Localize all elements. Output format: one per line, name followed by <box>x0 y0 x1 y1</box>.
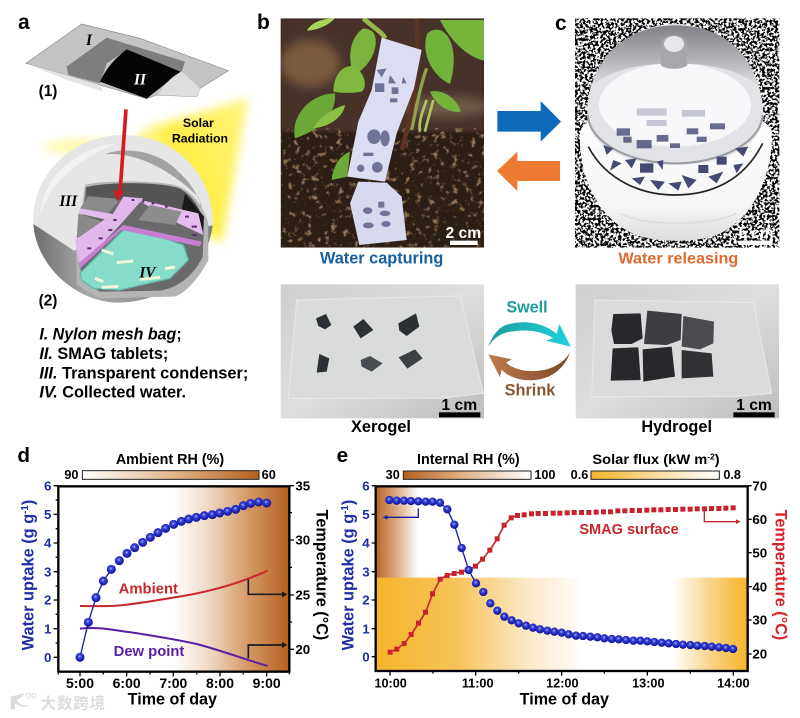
annotation: dew point: Dew point <box>114 644 184 660</box>
label: swell: Swell <box>506 299 548 317</box>
right axis labels: 60 <box>752 512 767 527</box>
solar radiation label: Solar <box>183 116 214 130</box>
annotation: SMAG surface: SMAG surface <box>579 522 679 538</box>
right axis labels <box>295 478 311 657</box>
icon: dome condenser (2) <box>33 135 213 303</box>
label: water capturing: Water capturing <box>320 250 443 268</box>
label: water releasing: Water releasing <box>618 250 738 268</box>
panel label b: b <box>257 11 270 34</box>
colorbar: solar flux <box>571 451 741 482</box>
colorbar: solar flux: -2 <box>707 452 715 461</box>
chart e <box>337 444 791 709</box>
panel label a: a <box>18 11 30 34</box>
right axis labels: 50 <box>752 545 767 560</box>
colorbar: ambient RH: Ambient RH (%) <box>116 452 224 468</box>
left axis labels <box>44 478 52 665</box>
right axis labels: 35 <box>295 478 311 493</box>
colorbar: internal RH <box>386 452 555 482</box>
axes frame and ticks <box>54 486 294 676</box>
arrow: shrink <box>488 353 570 380</box>
right axis title: Temperature (°C) <box>772 510 791 640</box>
watermark <box>11 693 105 713</box>
x axis labels: 8:00 <box>206 675 234 691</box>
label (1): (1) <box>39 83 57 100</box>
colorbar: internal RH: Internal RH (%) <box>417 452 520 468</box>
left axis labels: 2 <box>362 593 370 608</box>
legend list: I. Nylon mesh bag; <box>39 325 182 343</box>
chart d <box>11 444 332 713</box>
x axis labels: 10:00 <box>374 676 407 690</box>
left axis labels: 4 <box>362 536 370 551</box>
panel label e: e <box>337 444 348 467</box>
left axis labels: 3 <box>44 564 51 579</box>
icon: nylon mesh bag (1): I <box>85 32 93 49</box>
panel a: diagram of nylon bag and solar condenser <box>26 24 248 402</box>
colorbar: internal RH: 30 <box>386 468 400 482</box>
photo: xerogel <box>281 284 484 418</box>
icon: nylon mesh bag (1): II <box>133 72 147 89</box>
scale bar 1 cm: 1 cm <box>441 397 477 414</box>
icon: nylon mesh bag (1) <box>26 24 228 99</box>
left axis title: -1 <box>20 505 31 514</box>
left axis labels: 6 <box>44 478 51 493</box>
xerogel and hydrogel row <box>281 284 779 436</box>
panel label d: d <box>17 444 30 467</box>
right axis labels: 30 <box>295 533 310 548</box>
label: shrink: Shrink <box>505 382 556 400</box>
x axis labels: 11:00 <box>462 676 494 690</box>
legend list: II. SMAG tablets; <box>39 345 168 363</box>
colorbar: solar flux: 0.8 <box>723 468 741 482</box>
solar radiation label: Radiation <box>172 132 228 146</box>
plot background: solar flux <box>377 578 747 671</box>
left axis labels: 1 <box>44 621 52 636</box>
left axis labels: 6 <box>362 478 370 493</box>
arrow: dew point to right axis <box>248 642 287 658</box>
colorbar: solar flux: 0.6 <box>571 468 588 482</box>
data: water uptake <box>75 497 271 662</box>
colorbar: internal RH: 100 <box>534 468 555 482</box>
right axis labels: 40 <box>752 579 767 594</box>
axes frame and ticks <box>372 486 752 676</box>
left axis title: ) <box>18 500 37 505</box>
photo: hydrogel <box>576 284 779 418</box>
right axis labels: 25 <box>295 588 311 603</box>
x axis title: Time of day <box>128 691 217 709</box>
x axis labels: 7:00 <box>159 675 188 691</box>
photo: desiccator dome on granite <box>575 18 779 248</box>
left axis labels: 0 <box>44 650 51 665</box>
right axis labels: 20 <box>295 642 310 657</box>
left axis labels: 4 <box>44 536 52 551</box>
arrow: orange left <box>497 152 560 191</box>
red arrow from bag to condenser <box>113 109 126 201</box>
x axis labels: 12:00 <box>546 676 579 690</box>
arrow: blue right <box>497 101 561 142</box>
arrow: uptake to left axis <box>383 508 418 520</box>
icon: dome condenser (2): III <box>58 193 78 210</box>
label: hydrogel: Hydrogel <box>641 418 712 436</box>
legend list <box>39 325 248 402</box>
left axis title: -1 <box>340 505 351 514</box>
left axis labels: 2 <box>44 593 51 608</box>
photo: bag hanging on plant <box>280 18 490 248</box>
line: ambient temperature <box>80 571 268 606</box>
right axis title: Temperature (°C) <box>313 510 332 640</box>
icon: dome condenser (2): IV <box>138 264 157 281</box>
plot background <box>58 487 289 672</box>
arrow: ambient to right axis <box>248 579 287 597</box>
left axis title: ) <box>338 500 357 505</box>
solar radiation label <box>172 116 228 146</box>
left axis title: Water uptake (g g <box>338 511 357 650</box>
panel b and c photos and arrows <box>280 18 779 268</box>
x axis labels: 6:00 <box>113 675 141 691</box>
left axis labels: 1 <box>362 621 370 636</box>
legend list: IV. Collected water. <box>39 384 186 402</box>
right axis labels: 20 <box>752 647 767 662</box>
scale bar 1 cm: 1 cm <box>736 397 772 414</box>
legend list: III. Transparent condenser; <box>39 364 248 382</box>
x axis labels: 14:00 <box>717 676 750 690</box>
left axis labels: 5 <box>362 507 370 522</box>
scale bar 5 cm: 5 cm <box>739 225 773 242</box>
right axis labels <box>752 478 767 662</box>
x axis labels <box>66 675 281 691</box>
colorbar: ambient RH <box>64 452 276 482</box>
line: dew point <box>80 628 268 666</box>
colorbar: solar flux: Solar flux (kW m <box>592 451 702 467</box>
arrow: temperature to right axis <box>704 511 741 524</box>
left axis labels: 3 <box>362 564 370 579</box>
annotation: ambient: Ambient <box>119 581 178 597</box>
x axis title: Time of day <box>520 691 609 709</box>
x axis labels <box>374 676 750 690</box>
left axis labels: 5 <box>44 507 52 522</box>
label (2): (2) <box>39 292 57 309</box>
arrow: swell <box>488 322 571 347</box>
scale bar 2 cm: 2 cm <box>445 225 481 242</box>
left axis title: Water uptake (g g <box>18 511 37 650</box>
label: xerogel: Xerogel <box>351 418 411 436</box>
colorbar: solar flux: ) <box>715 451 720 467</box>
data: water uptake <box>385 496 737 653</box>
x axis labels: 5:00 <box>66 675 94 691</box>
data: SMAG surface temperature <box>388 505 736 655</box>
panel label c: c <box>555 12 567 35</box>
right axis labels: 30 <box>752 613 767 628</box>
left axis labels: 0 <box>362 649 370 664</box>
x axis labels: 9:00 <box>253 675 281 691</box>
colorbar: ambient RH: 90 <box>64 468 78 482</box>
colorbar: ambient RH: 60 <box>262 468 276 482</box>
solar glow <box>43 98 248 243</box>
plot background: internal RH <box>377 487 418 578</box>
watermark: 大数跨境 <box>41 695 105 713</box>
right axis labels: 70 <box>752 478 767 493</box>
left axis labels <box>362 478 370 664</box>
x axis labels: 13:00 <box>632 676 665 690</box>
